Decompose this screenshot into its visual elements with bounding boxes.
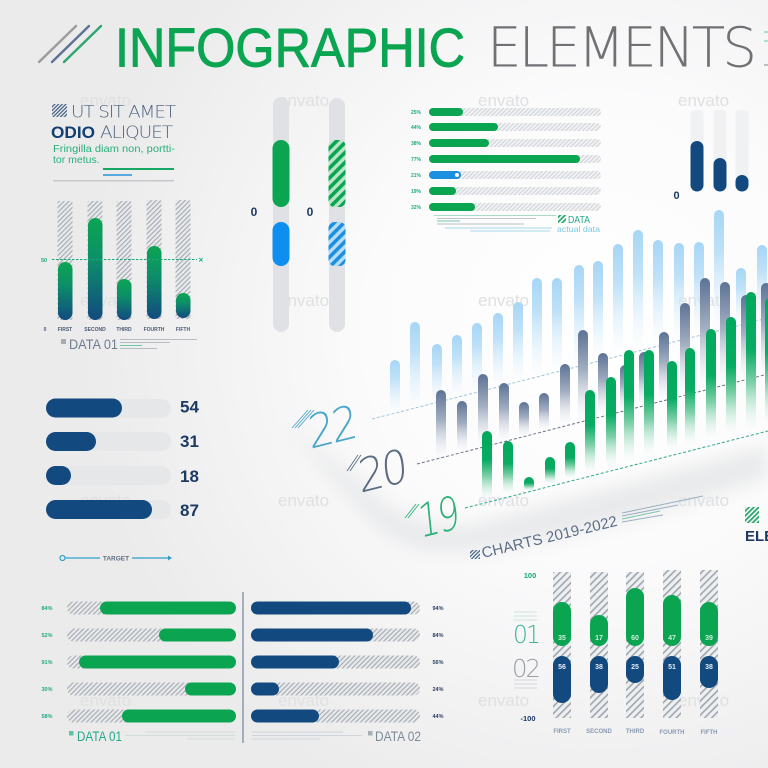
column second (590, 572, 608, 718)
column fifth (176, 200, 190, 319)
envato watermarks: envato (478, 91, 529, 110)
legend data 01 (69, 728, 235, 744)
axis labels: FOURTH (144, 327, 165, 333)
zero labels: 0 (251, 205, 258, 219)
axis values: 100 (524, 571, 536, 580)
left green bars: 58% (41, 714, 53, 720)
target arrow (60, 556, 172, 562)
legend data: DATA (568, 215, 590, 226)
chart caption (470, 496, 703, 562)
text block: ut sit amet: ODIO (51, 123, 95, 142)
dashed target line (52, 258, 197, 260)
envato watermarks: envato (478, 491, 529, 510)
panel: small navy columns: 0 (673, 190, 680, 202)
panel: diverging columns 01 02 (512, 570, 718, 736)
column first: 35 (558, 635, 566, 642)
row 87: 87 (180, 501, 199, 520)
column third: 60 (631, 635, 639, 642)
envato watermarks: envato (278, 691, 329, 710)
row 2020 gray bars (436, 278, 768, 458)
title slashes icon (39, 26, 101, 62)
column second: 38 (595, 664, 603, 671)
text block: ut sit amet: ALIQUET (100, 123, 174, 143)
panel: vertical bar chart data 01 (41, 200, 204, 352)
envato watermarks: envato (80, 291, 131, 310)
row 31 (46, 432, 199, 451)
envato watermarks: envato (278, 291, 329, 310)
column fifth: 38 (705, 664, 713, 671)
percent labels: 25% (411, 110, 422, 116)
row 18: 18 (180, 467, 199, 486)
envato watermarks: envato (678, 91, 729, 110)
percent labels: 32% (411, 205, 422, 211)
title edge marks (764, 32, 768, 65)
legend data (557, 215, 600, 234)
column fourth: 51 (668, 664, 676, 671)
row 18 (46, 466, 199, 486)
title: ELEMENTS (487, 16, 754, 80)
legend data 02: DATA 02 (375, 728, 421, 744)
column first: 56 (558, 664, 566, 671)
row 2022 dashed line (372, 318, 768, 419)
column fourth: 47 (668, 635, 676, 642)
text block: ut sit amet (51, 102, 177, 182)
row 2019 dashed line (465, 431, 768, 508)
panel: paired vertical sliders: 0 (307, 205, 314, 219)
column first (58, 201, 72, 320)
row 54: 54 (180, 398, 199, 416)
percent labels (411, 110, 422, 211)
legend data 02 (252, 728, 421, 744)
panel: diverging columns 01 02: -100 (520, 714, 536, 723)
row 2022 blue bars (390, 210, 767, 413)
left green bars: 84% (41, 606, 53, 612)
right navy bars: 94% (432, 606, 444, 612)
series labels: 01 (513, 620, 539, 649)
text block: ut sit amet: tor metus. (53, 154, 100, 166)
axis labels: 0 (44, 327, 47, 333)
envato watermarks: envato (80, 491, 131, 510)
percent labels: 77% (411, 157, 422, 163)
panel: paired vertical sliders (251, 97, 346, 332)
title: INFOGRAPHIC (115, 16, 465, 78)
column fifth: 39 (705, 635, 713, 642)
chart caption: CHARTS 2019-2022 (480, 513, 619, 562)
envato watermarks: envato (278, 491, 329, 510)
icon: hatch square (52, 104, 67, 117)
legend data 01: DATA 01 (77, 728, 122, 744)
row 54 (46, 398, 199, 418)
column third (116, 201, 132, 320)
right navy bars: 24% (432, 687, 444, 693)
legend lines (434, 216, 556, 231)
column second (88, 201, 102, 320)
column fourth (146, 200, 162, 319)
axis labels: THIRD (116, 327, 132, 333)
envato watermarks (80, 91, 729, 710)
row 2020 dashed line (417, 374, 768, 464)
axis labels: SECOND (84, 327, 106, 333)
right navy bars: 84% (432, 633, 444, 639)
percent labels: 21% (411, 173, 422, 179)
axis labels (553, 729, 718, 736)
series labels: 02 (512, 654, 539, 683)
column fourth (663, 570, 681, 718)
axis labels: FOURTH (660, 730, 684, 736)
column second: 17 (595, 635, 603, 642)
column third (626, 572, 644, 718)
left green bars: 30% (41, 687, 53, 693)
panel: diverging percent bars (41, 592, 444, 744)
column fifth (700, 570, 718, 718)
row 87 (46, 500, 199, 520)
panel: rounded horizontal bars with totals (46, 398, 199, 520)
right navy bars: 44% (432, 714, 444, 720)
panel: horizontal bars percent (411, 108, 601, 234)
percent labels: 19% (411, 189, 422, 195)
axis labels: FIRST (58, 327, 72, 333)
row 2019 green bars (482, 292, 768, 500)
axis value 50: 50 (41, 258, 47, 264)
envato watermarks: envato (80, 91, 131, 110)
right navy bars: 56% (432, 660, 444, 666)
envato watermarks: envato (678, 291, 729, 310)
divider (242, 592, 244, 743)
axis labels (44, 327, 190, 333)
series labels (512, 612, 539, 688)
year label 19 (405, 485, 460, 549)
column first (553, 572, 571, 718)
left green bars: 91% (41, 660, 53, 666)
legend data: actual data (557, 224, 600, 234)
column third: 25 (631, 664, 639, 671)
envato watermarks: envato (278, 91, 329, 110)
envato watermarks: envato (478, 291, 529, 310)
axis labels: FIFTH (176, 327, 190, 333)
axis labels: FIRST (553, 729, 571, 735)
percent labels: 44% (411, 125, 422, 131)
legend data 01 (61, 336, 197, 352)
slider hatched (328, 98, 346, 332)
year label 20: 20 (355, 438, 408, 504)
percent labels: 38% (411, 141, 422, 147)
perspective plate shadow (285, 425, 768, 553)
panel: small navy columns (673, 110, 748, 202)
text block: ut sit amet: UT SIT AMET (71, 102, 177, 122)
legend data 01: DATA 01 (69, 336, 118, 352)
text block: ut sit amet: Fringilla diam non, portti- (53, 143, 176, 155)
axis labels: FIFTH (700, 730, 718, 736)
year label 19: 19 (415, 485, 460, 549)
envato watermarks: envato (478, 691, 529, 710)
right navy bars (251, 602, 444, 722)
left green bars (41, 602, 236, 722)
highlighted blue bar (429, 171, 461, 179)
envato watermarks: envato (678, 691, 729, 710)
row 31: 31 (180, 432, 199, 451)
icon: hatch (470, 550, 480, 559)
axis labels: THIRD (626, 729, 645, 735)
corner label elements (745, 507, 768, 545)
title (115, 16, 754, 80)
axis labels: SECOND (586, 729, 613, 735)
tracks (429, 108, 601, 211)
target arrow: TARGET (103, 556, 129, 562)
fills (429, 108, 580, 211)
left green bars: 52% (41, 633, 53, 639)
envato watermarks: envato (678, 491, 729, 510)
slider solid (272, 97, 290, 332)
envato watermarks: envato (80, 691, 131, 710)
chart: 3D perspective bars (372, 210, 768, 508)
target x marker: × (199, 256, 204, 264)
year label 22: 22 (305, 394, 358, 460)
